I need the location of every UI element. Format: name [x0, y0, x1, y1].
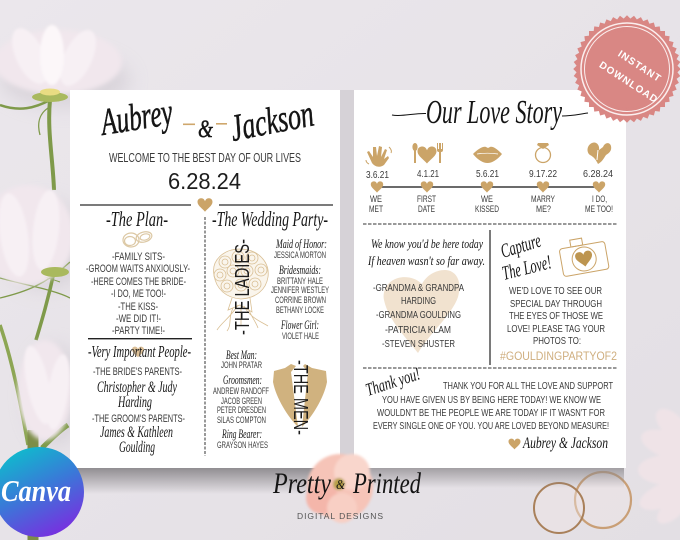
wedding rings: [534, 472, 631, 533]
men names: Best Man:: [226, 347, 257, 362]
photo section: SPECIAL DAY THROUGH: [510, 298, 602, 310]
card shadows: [72, 90, 624, 494]
parents list: [92, 366, 185, 456]
badge: instant download: DOWNLOAD: [597, 60, 660, 106]
thank you section: WOULDN'T BE THE PEOPLE WE ARE TODAY IF IT WASN'T FOR: [377, 408, 605, 419]
timeline: [366, 142, 613, 215]
title: couple names: [96, 91, 317, 150]
parents list: James & Kathleen: [100, 424, 173, 441]
ladies names: Maid of Honor:: [275, 236, 327, 251]
list: the plan: -HERE COMES THE BRIDE-: [91, 276, 186, 288]
list: the plan: -I DO, ME TOO!-: [111, 288, 166, 300]
heading: the plan: -The Plan-: [106, 207, 168, 231]
ladies names: JENNIFER WESTLEY: [271, 285, 329, 296]
men names: GRAYSON HAYES: [217, 440, 268, 451]
list: the plan: [86, 251, 190, 337]
ladies names: VIOLET HALE: [282, 331, 319, 342]
milestone: i do: I DO,: [592, 194, 607, 205]
illustration: tuxedo: [273, 364, 327, 427]
milestone: i do: ME TOO!: [585, 204, 613, 215]
milestone: we met: MET: [369, 204, 383, 215]
men names: [213, 347, 269, 451]
milestone: marry me: MARRY: [531, 194, 555, 205]
photo section: PHOTOS TO:: [533, 335, 581, 347]
panel: program card: [70, 90, 340, 468]
logo: pretty and printed: &: [336, 478, 345, 493]
milestone: we kissed: KISSED: [475, 204, 499, 215]
photo section: The Love!: [500, 251, 554, 285]
list: the plan: -THE KISS-: [118, 301, 158, 313]
logo: canva: [0, 447, 84, 537]
memorial section: -PATRICIA KLAM: [385, 324, 451, 336]
milestone: first date: DATE: [418, 204, 435, 215]
men names: Groomsmen:: [223, 372, 262, 387]
photo section: #GOULDINGPARTYOF2: [500, 351, 617, 363]
parents list: -THE GROOM'S PARENTS-: [92, 413, 185, 425]
memorial section: -STEVEN SHUSTER: [382, 338, 455, 350]
title: our love story: [392, 94, 588, 131]
milestone: marry me: [529, 143, 557, 215]
logo: pretty and printed: Pretty: [272, 467, 332, 500]
milestone: first date: FIRST: [417, 194, 436, 205]
photo section: Capture: [498, 230, 544, 263]
ladies names: CORRINE BROWN: [275, 295, 326, 306]
title: couple names: &: [198, 116, 213, 143]
title: our love story: Our Love Story: [426, 94, 563, 131]
thank you section: YOU HAVE GIVEN US BY BEING HERE TODAY! WE KNOW WE: [382, 395, 601, 406]
milestone: marry me: 9.17.22: [529, 169, 557, 180]
memorial section: [367, 236, 485, 353]
label: the men: -THE MEN-: [289, 360, 311, 435]
ladies names: BRITTANY HALE: [277, 276, 323, 287]
logo: pretty and printed: DIGITAL DESIGNS: [297, 511, 383, 521]
ladies names: [271, 236, 329, 342]
ladies names: JESSICA MORTON: [274, 250, 326, 261]
badge: instant download: INSTANT: [616, 49, 663, 85]
flower: right side: [635, 403, 680, 528]
men names: Ring Bearer:: [221, 426, 262, 441]
logo: canva: Canva: [1, 473, 71, 508]
label: the ladies: -THE LADIES-: [232, 239, 254, 335]
milestone: we met: 3.6.21: [366, 170, 389, 181]
heading: the wedding party: -The Wedding Party-: [212, 207, 328, 231]
heading: very important people: -Very Important People-: [88, 342, 191, 361]
title: couple names: Aubrey: [96, 91, 176, 144]
title: couple names: Jackson: [227, 93, 317, 150]
photo section: THE EYES OF THOSE WE: [509, 310, 603, 322]
ladies names: Flower Girl:: [280, 317, 319, 332]
parents list: Harding: [117, 394, 152, 411]
parents list: Christopher & Judy: [97, 379, 178, 396]
icon: rings: [123, 230, 153, 247]
milestone: we met: WE: [370, 194, 382, 205]
thank you section: THANK YOU FOR ALL THE LOVE AND SUPPORT: [443, 381, 613, 392]
men names: JOHN PRATAR: [221, 360, 262, 371]
men names: PETER DRESDEN: [217, 405, 266, 416]
milestone: marry me: ME?: [536, 204, 551, 215]
list: the plan: -GROOM WAITS ANXIOUSLY-: [86, 263, 190, 275]
milestone: first date: [412, 143, 443, 215]
ladies names: BETHANY LOCKE: [276, 305, 324, 316]
milestone: i do: [583, 142, 613, 215]
thank you section: Thank you!: [363, 363, 422, 400]
thank you section: Aubrey & Jackson: [522, 435, 608, 452]
flowers: left side: [0, 23, 130, 540]
milestone: i do: 6.28.24: [583, 169, 613, 180]
divider with heart: [80, 198, 333, 212]
list: the plan: -WE DID IT!-: [116, 313, 161, 325]
men names: SILAS COMPTON: [217, 415, 266, 426]
date: 6.28.24: [168, 168, 241, 194]
welcome line: WELCOME TO THE BEST DAY OF OUR LIVES: [109, 151, 301, 165]
icon: camera: [558, 234, 609, 277]
logo: pretty and printed: [272, 454, 422, 523]
milestone: we met: [366, 146, 391, 215]
memorial section: If heaven wasn't so far away.: [367, 253, 485, 268]
heading: very important people: [88, 342, 191, 361]
list: the plan: -PARTY TIME!-: [112, 325, 165, 337]
men names: JACOB GREEN: [221, 396, 262, 407]
milestone: we kissed: WE: [481, 194, 493, 205]
list: the plan: -FAMILY SITS-: [112, 251, 165, 263]
badge: instant download: [573, 15, 680, 123]
milestone: we kissed: 5.6.21: [476, 169, 499, 180]
logo: pretty and printed: Printed: [352, 467, 422, 500]
illustration: bouquet: [214, 249, 268, 331]
ladies names: Bridesmaids:: [279, 262, 321, 277]
parents list: Goulding: [119, 439, 155, 456]
panel: love story card: [354, 90, 626, 468]
milestone: first date: 4.1.21: [417, 169, 439, 180]
memorial section: -GRANDMA & GRANDPA: [373, 282, 464, 294]
photo section: WE'D LOVE TO SEE OUR: [509, 285, 602, 297]
parents list: -THE BRIDE'S PARENTS-: [93, 366, 182, 378]
photo section: [498, 230, 617, 363]
men names: ANDREW RANDOFF: [213, 386, 269, 397]
memorial section: We know you'd be here today: [371, 236, 483, 251]
memorial section: HARDING: [401, 295, 436, 307]
thank you section: [363, 363, 613, 452]
photo section: LOVE! PLEASE TAG YOUR: [507, 323, 605, 335]
milestone: we kissed: [473, 147, 502, 215]
memorial section: -GRANDMA GOULDING: [376, 309, 461, 321]
